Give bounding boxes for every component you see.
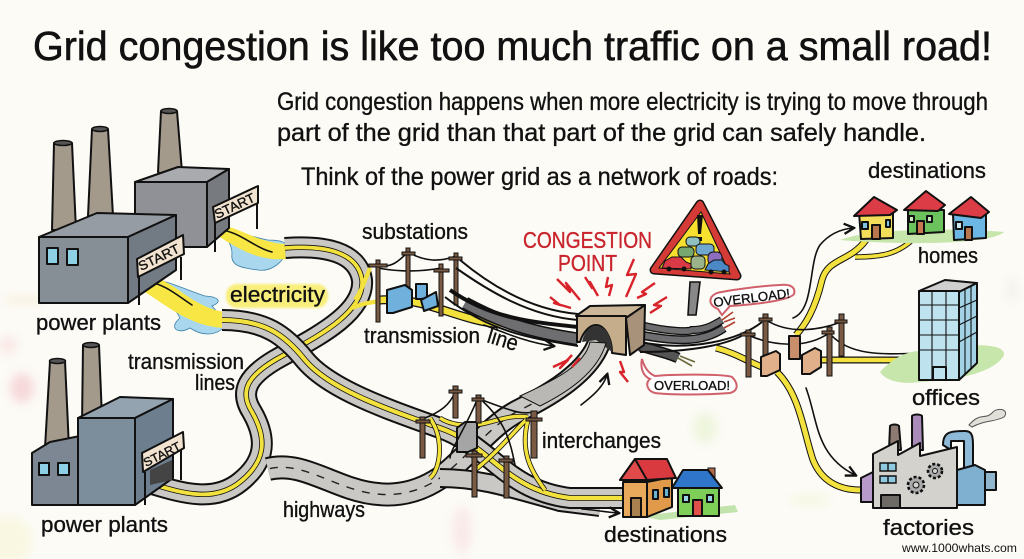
overload callout bottom <box>641 359 737 394</box>
electricity spills <box>143 225 295 334</box>
intro paragraph <box>277 88 988 147</box>
label: highways: highways <box>283 497 365 522</box>
label: congestion point: POINT <box>558 250 617 276</box>
start sign 3 <box>141 432 184 505</box>
highway with dashed centre <box>268 340 600 507</box>
paint stains <box>0 278 1017 559</box>
title: Grid congestion is like too much traffic on a small road! <box>33 23 992 69</box>
label: power plants bottom: power plants <box>41 512 168 537</box>
label: offices: offices <box>912 385 980 410</box>
red lightning bolts <box>550 259 667 382</box>
label: transmission line: transmission <box>364 323 480 348</box>
yellow branch to substation <box>352 268 400 308</box>
post <box>688 282 700 315</box>
start sign 1 <box>136 235 184 305</box>
chimney <box>158 111 182 176</box>
factories <box>861 409 1006 508</box>
overload callout top: OVERLOAD! <box>713 286 791 310</box>
interchange poles and box <box>416 386 545 498</box>
label: transmission line <box>364 323 521 356</box>
overloaded transmission cables <box>445 260 762 366</box>
label: destinations bottom: destinations <box>604 522 727 547</box>
label: substations: substations <box>362 219 468 244</box>
label: congestion point: CONGESTION <box>523 227 652 253</box>
power plant 2 back <box>135 108 229 247</box>
arrow to factories <box>806 388 855 475</box>
tunnel congestion point <box>520 305 645 406</box>
label: electricity: electricity <box>230 282 325 307</box>
warning sign <box>654 204 737 315</box>
building <box>135 167 229 182</box>
road: upper plant through interchange <box>222 320 622 498</box>
offices <box>880 280 1004 383</box>
label: transmission lines: lines <box>195 370 235 395</box>
homes <box>840 191 1004 243</box>
label: transmission line: line <box>485 323 521 356</box>
destinations heading: destinations <box>868 158 986 183</box>
bottom destination houses <box>620 459 738 520</box>
label: transmission lines: transmission <box>128 349 244 374</box>
bottom destination arrows <box>582 509 618 513</box>
website credit: www.1000whats.com <box>901 541 1017 555</box>
road: power plant to substation loop <box>152 247 362 494</box>
cars <box>686 237 700 246</box>
right distribution network <box>716 234 920 490</box>
power plant 1 front <box>39 126 176 303</box>
exclamation <box>697 215 703 241</box>
road network subheading: Think of the power grid as a network of roads: <box>301 163 778 191</box>
overload callout bottom: OVERLOAD! <box>654 378 730 393</box>
arrow up to tunnel <box>581 375 607 405</box>
arrow to tunnel <box>484 325 553 346</box>
start sign 3: START <box>141 439 184 470</box>
start sign 2 <box>212 186 258 252</box>
label: interchanges: interchanges <box>542 428 661 453</box>
start sign 2: START <box>212 190 257 222</box>
arrow to homes <box>793 228 853 318</box>
start sign 1: START <box>136 241 182 274</box>
label: power plants top: power plants <box>36 310 161 335</box>
label: homes: homes <box>918 243 978 268</box>
power plants bottom <box>32 342 173 505</box>
substation <box>369 248 500 324</box>
intro paragraph: part of the grid than that part of the grid can safely handle. <box>277 119 926 147</box>
label: congestion point <box>523 227 652 276</box>
label: factories: factories <box>883 515 974 540</box>
right poles and transformers <box>741 314 847 377</box>
label: transmission lines <box>128 349 244 395</box>
